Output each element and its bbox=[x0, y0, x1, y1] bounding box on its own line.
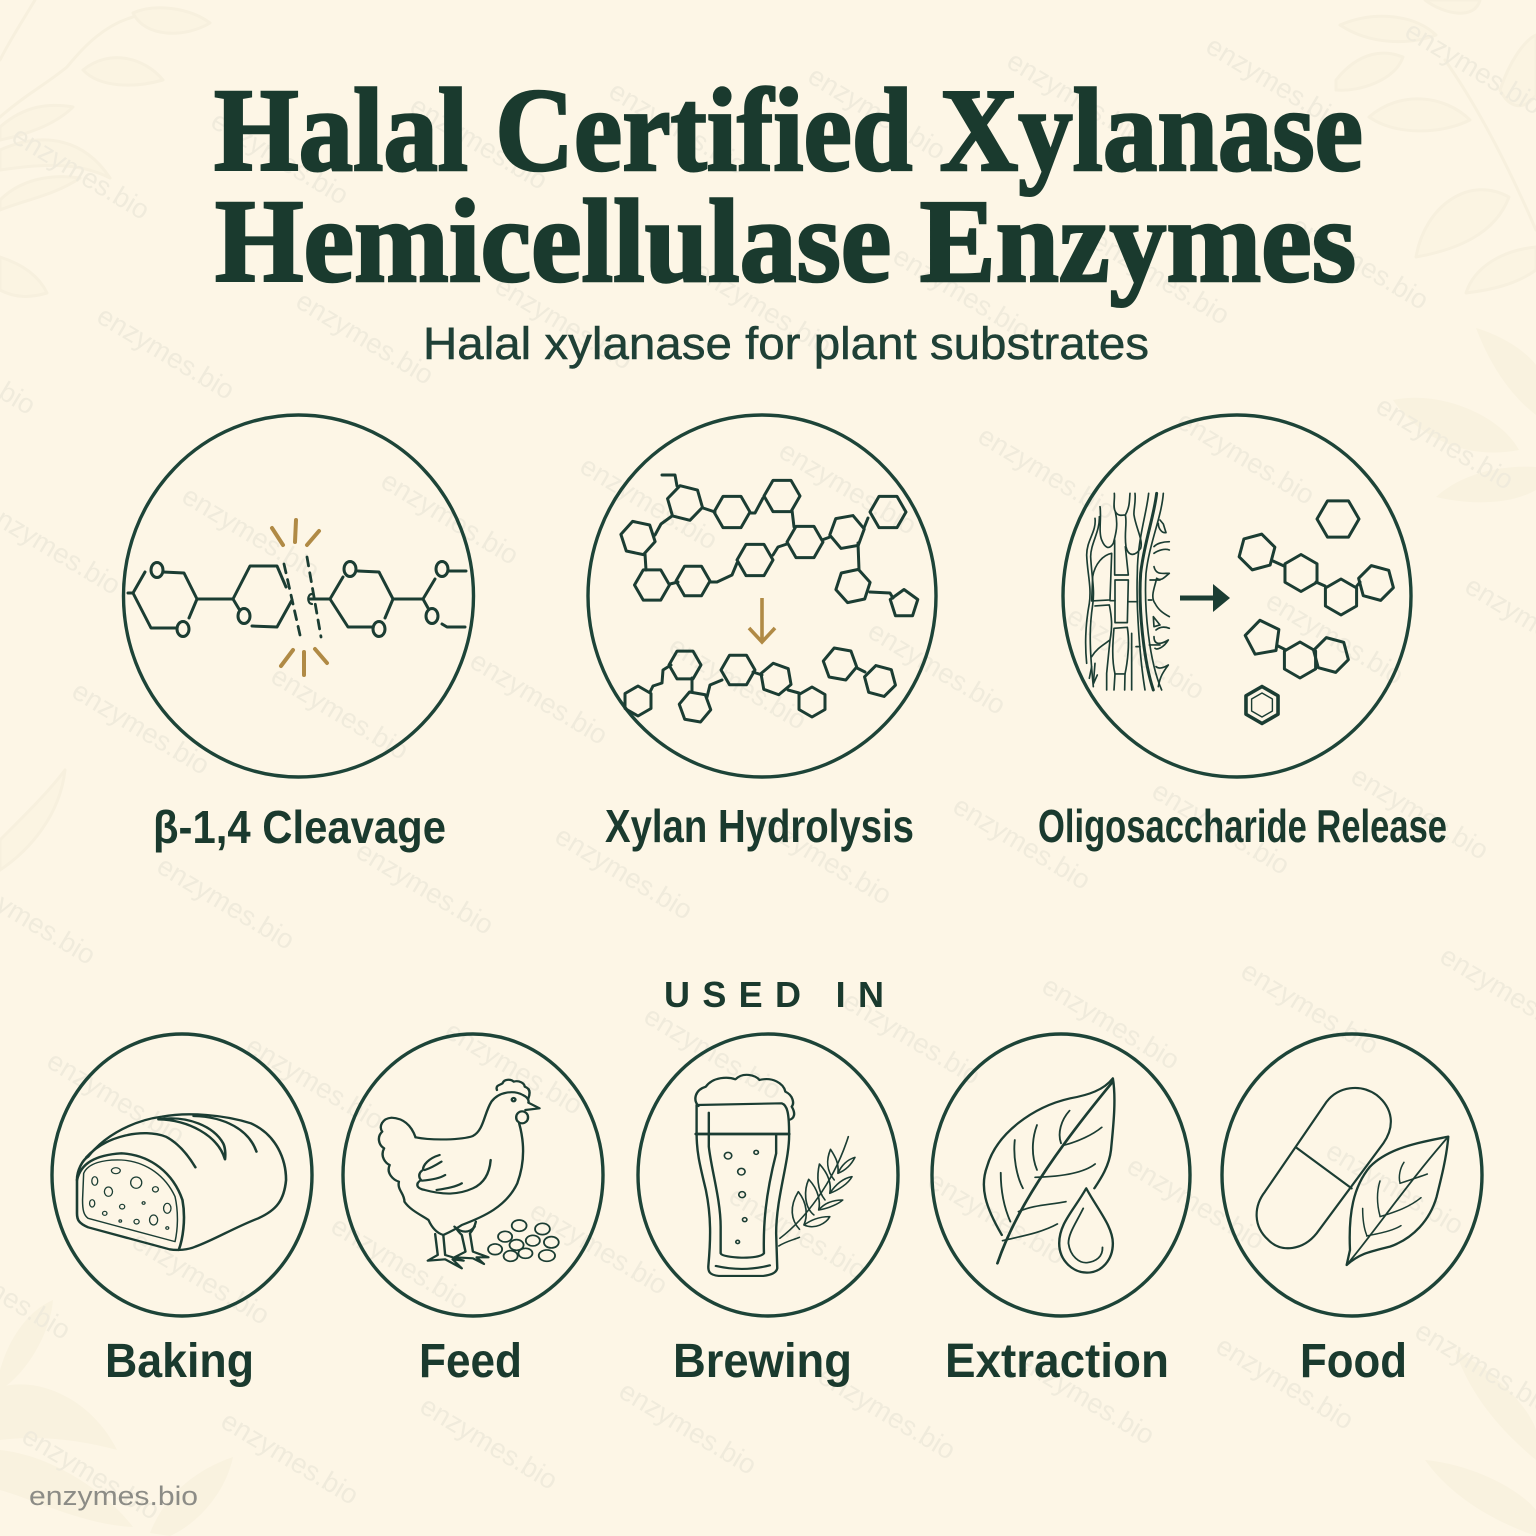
panel: oligosaccharide release bbox=[1038, 415, 1447, 852]
circle frame bbox=[588, 415, 936, 777]
circle frame bbox=[343, 1034, 603, 1316]
icon: beer glass and wheat bbox=[695, 1075, 855, 1276]
watermark pattern: enzymes.bio bbox=[216, 1405, 364, 1511]
panel: extraction bbox=[932, 1034, 1190, 1388]
watermark pattern: enzymes.bio bbox=[152, 850, 300, 956]
watermark pattern: enzymes.bio bbox=[604, 75, 752, 181]
watermark pattern: enzymes.bio bbox=[888, 240, 1036, 346]
watermark pattern: enzymes.bio bbox=[1286, 210, 1434, 316]
icon: xylan polymer bbox=[618, 475, 918, 616]
watermark pattern: enzymes.bio bbox=[575, 450, 723, 556]
watermark pattern: enzymes.bio bbox=[42, 1045, 190, 1151]
icon: bread bbox=[77, 1114, 286, 1250]
watermark pattern: enzymes.bio bbox=[550, 820, 698, 926]
circle frame bbox=[1063, 415, 1411, 777]
watermark pattern: enzymes.bio bbox=[1321, 1135, 1469, 1241]
watermark pattern: enzymes.bio bbox=[1122, 1150, 1270, 1256]
watermark pattern: enzymes.bio bbox=[127, 1225, 275, 1331]
watermark pattern: enzymes.bio bbox=[749, 805, 897, 911]
cleavage rays bbox=[272, 520, 327, 675]
panel: brewing bbox=[638, 1034, 898, 1388]
watermark pattern: enzymes.bio bbox=[351, 835, 499, 941]
label: β-1,4 Cleavage bbox=[153, 801, 446, 853]
arrow: release bbox=[1180, 584, 1230, 612]
icon: plant cell wall bbox=[1086, 493, 1169, 690]
watermark pattern: enzymes.bio bbox=[405, 90, 553, 196]
watermark pattern: enzymes.bio bbox=[724, 1180, 872, 1286]
watermark pattern: enzymes.bio bbox=[1062, 600, 1210, 706]
circle frame bbox=[52, 1034, 312, 1316]
watermark pattern: enzymes.bio bbox=[490, 270, 638, 376]
watermark pattern: enzymes.bio bbox=[838, 985, 986, 1091]
section heading: used in: USED IN bbox=[664, 974, 884, 1015]
watermark pattern: enzymes.bio bbox=[1037, 970, 1185, 1076]
watermark pattern: enzymes.bio bbox=[266, 660, 414, 766]
watermark pattern: enzymes.bio bbox=[1236, 955, 1384, 1061]
watermark pattern: enzymes.bio bbox=[206, 105, 354, 211]
watermark pattern: enzymes.bio bbox=[863, 615, 1011, 721]
label: Food bbox=[1300, 1335, 1407, 1388]
title: Halal Certified Xylanase bbox=[214, 64, 1363, 196]
watermark pattern: enzymes.bio bbox=[1346, 760, 1494, 866]
icon: capsule bbox=[1257, 1088, 1391, 1248]
watermark pattern: enzymes.bio bbox=[1211, 1330, 1359, 1436]
watermark pattern: enzymes.bio bbox=[639, 1000, 787, 1106]
panel: beta-1,4 cleavage bbox=[124, 415, 474, 853]
watermark pattern: enzymes.bio bbox=[1172, 405, 1320, 511]
watermark pattern: enzymes.bio bbox=[241, 1030, 389, 1136]
watermark pattern: enzymes.bio bbox=[415, 1390, 563, 1496]
watermark pattern: enzymes.bio bbox=[803, 60, 951, 166]
icon: sugar chain bbox=[128, 562, 466, 636]
icon: chicken and grains bbox=[379, 1080, 559, 1268]
watermark pattern: enzymes.bio bbox=[7, 120, 155, 226]
watermark pattern: enzymes.bio bbox=[923, 1165, 1071, 1271]
watermark pattern: enzymes.bio bbox=[973, 420, 1121, 526]
icon: leaf and drop bbox=[984, 1078, 1114, 1273]
watermark pattern: enzymes.bio bbox=[1012, 1345, 1160, 1451]
arrow: hydrolysis bbox=[749, 598, 775, 642]
watermark pattern: enzymes.bio bbox=[813, 1360, 961, 1466]
watermark pattern: enzymes.bio bbox=[1002, 45, 1150, 151]
label: Extraction bbox=[945, 1335, 1169, 1388]
watermark pattern: enzymes.bio bbox=[67, 675, 215, 781]
watermark pattern: enzymes.bio bbox=[465, 645, 613, 751]
panel: xylan hydrolysis bbox=[588, 415, 936, 852]
watermark pattern: enzymes.bio bbox=[1087, 225, 1235, 331]
icon: oligosaccharides bbox=[1235, 501, 1397, 728]
title: Hemicellulase Enzymes bbox=[215, 175, 1356, 307]
cleavage dashes bbox=[284, 557, 321, 637]
watermark pattern: enzymes.bio bbox=[177, 480, 325, 586]
watermark pattern: enzymes.bio bbox=[1261, 585, 1409, 691]
watermark pattern: enzymes.bio bbox=[17, 1420, 165, 1526]
subtitle: Halal xylanase for plant substrates bbox=[423, 318, 1149, 369]
watermark pattern: enzymes.bio bbox=[291, 285, 439, 391]
watermark pattern: enzymes.bio bbox=[664, 630, 812, 736]
watermark pattern: enzymes.bio bbox=[525, 1195, 673, 1301]
watermark pattern: enzymes.bio bbox=[326, 1210, 474, 1316]
panel: baking bbox=[52, 1034, 312, 1388]
circle frame bbox=[1222, 1034, 1482, 1316]
watermark pattern: enzymes.bio bbox=[440, 1015, 588, 1121]
panel: feed bbox=[343, 1034, 603, 1388]
watermark pattern: enzymes.bio bbox=[689, 255, 837, 361]
label: Feed bbox=[419, 1335, 522, 1388]
label: Baking bbox=[105, 1335, 254, 1388]
watermark pattern: enzymes.bio bbox=[1201, 30, 1349, 136]
watermark pattern: enzymes.bio bbox=[948, 790, 1096, 896]
circle frame bbox=[124, 415, 474, 777]
footer brand: enzymes.bio bbox=[29, 1481, 198, 1511]
label: Xylan Hydrolysis bbox=[605, 800, 914, 852]
circle frame bbox=[932, 1034, 1190, 1316]
watermark pattern: enzymes.bio bbox=[1371, 390, 1519, 496]
watermark pattern: enzymes.bio bbox=[774, 435, 922, 541]
label: Brewing bbox=[673, 1335, 852, 1388]
watermark pattern: enzymes.bio bbox=[376, 465, 524, 571]
title bbox=[214, 64, 1363, 307]
icon: xylan fragments bbox=[619, 647, 899, 723]
circle frame bbox=[638, 1034, 898, 1316]
watermark pattern: enzymes.bio bbox=[92, 300, 240, 406]
icon: leaf bbox=[1347, 1137, 1448, 1265]
watermark pattern: enzymes.bio bbox=[614, 1375, 762, 1481]
watermark pattern: enzymes.bio bbox=[1147, 775, 1295, 881]
panel: food bbox=[1222, 1034, 1482, 1388]
